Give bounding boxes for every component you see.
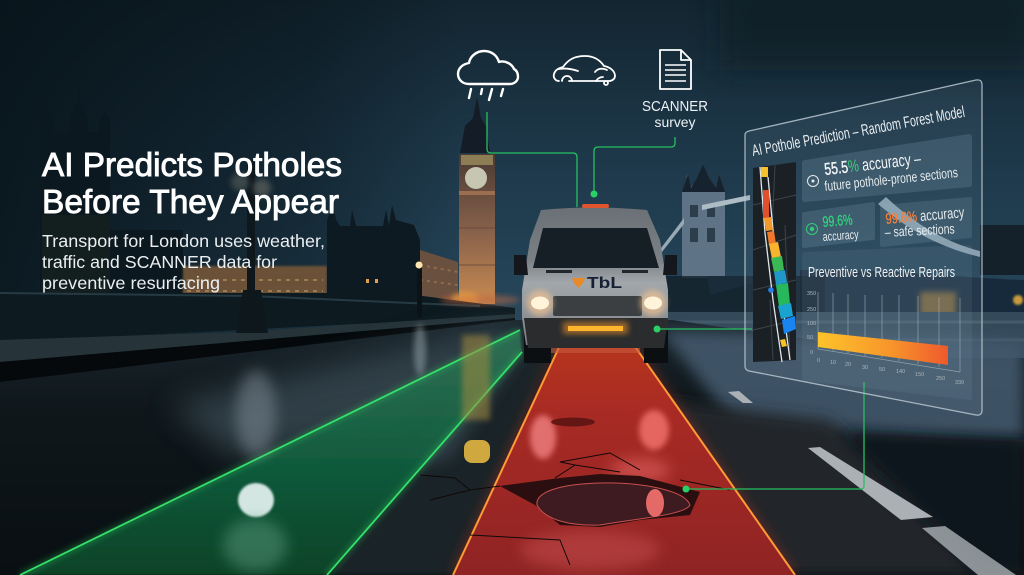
van wheels <box>524 330 668 363</box>
connector nodes <box>590 190 690 492</box>
card: 55.5% accuracy: 55.5% accuracy – <box>823 149 922 179</box>
van body <box>522 208 668 345</box>
subheading: traffic and SCANNER data for <box>42 252 277 272</box>
subheading: preventive resurfacing <box>42 273 220 293</box>
chart axis labels: 250 <box>807 307 816 313</box>
road lane dashes <box>728 391 1016 575</box>
grille <box>553 296 642 316</box>
card: 99.6% accuracy safe sections <box>880 197 972 247</box>
icon: rain cloud <box>458 51 518 100</box>
headline: Before They Appear <box>42 183 339 220</box>
bar chart: preventive vs reactive repairs <box>802 245 972 400</box>
chart axis labels: 10 <box>830 360 836 366</box>
chart heading: Preventive vs Reactive Repairs <box>808 264 955 281</box>
headline <box>42 146 342 220</box>
SCANNER survey label: survey <box>654 114 696 130</box>
chart axis labels: 330 <box>955 380 964 386</box>
windshield <box>533 228 659 268</box>
logo <box>572 275 622 292</box>
icon: survey document <box>660 50 691 89</box>
logo: TbL <box>587 275 622 292</box>
SCANNER survey label: SCANNER <box>642 98 708 115</box>
connector lines <box>487 112 864 489</box>
chart axis labels: 140 <box>896 369 905 375</box>
chart axis labels <box>807 291 964 386</box>
SCANNER survey label <box>642 98 708 130</box>
light bar <box>563 322 628 334</box>
Tower Bridge silhouette <box>655 164 1024 316</box>
embankment wall and pavement <box>0 293 520 382</box>
green safe lane beam <box>20 330 522 575</box>
chart axis labels: 20 <box>845 362 851 368</box>
card: 99.6% accuracy green: 99.6% <box>822 211 853 231</box>
bumper <box>524 318 668 348</box>
chart axis labels: 100 <box>807 321 816 327</box>
Big Ben tower <box>451 97 495 307</box>
headline: AI Predicts Potholes <box>42 146 342 183</box>
lamp posts <box>231 160 422 333</box>
card: 55.5% accuracy <box>802 134 972 202</box>
chart axis labels: 30 <box>862 365 868 371</box>
survey van <box>514 204 677 363</box>
map: road risk segments <box>753 162 796 362</box>
panel: AI pothole prediction <box>745 80 982 415</box>
mirrors <box>514 255 677 275</box>
card: 99.6% accuracy safe sections: 99.6% accuracy <box>885 204 965 228</box>
icon: car <box>554 56 615 85</box>
subheading <box>42 231 325 293</box>
card: 99.6% accuracy green <box>802 202 875 248</box>
hood vents <box>546 270 648 273</box>
wet road reflections <box>223 324 670 571</box>
chart axis labels: 350 <box>807 291 816 297</box>
road surface <box>0 320 1024 575</box>
chart axis labels: 250 <box>936 376 945 382</box>
red pothole lane beam <box>453 328 795 575</box>
chart axis labels: 0 <box>810 350 813 356</box>
night sky <box>0 0 1024 340</box>
headlights <box>527 290 666 316</box>
chart axis labels: 50 <box>879 367 885 373</box>
chart axis labels: 50 <box>807 335 813 341</box>
pothole with cracks <box>420 453 730 565</box>
roof lights <box>582 204 609 208</box>
chart axis labels: 150 <box>915 372 924 378</box>
card: 55.5% accuracy: future pothole-prone sections <box>824 164 959 194</box>
river <box>668 312 1024 358</box>
card: 99.6% accuracy safe sections: – safe sections <box>884 220 955 240</box>
card: 99.6% accuracy green: accuracy <box>822 227 860 244</box>
Houses of Parliament silhouette <box>40 85 458 304</box>
chart axis labels: 0 <box>817 358 820 364</box>
chart bar <box>818 332 948 365</box>
subheading: Transport for London uses weather, <box>42 231 325 251</box>
